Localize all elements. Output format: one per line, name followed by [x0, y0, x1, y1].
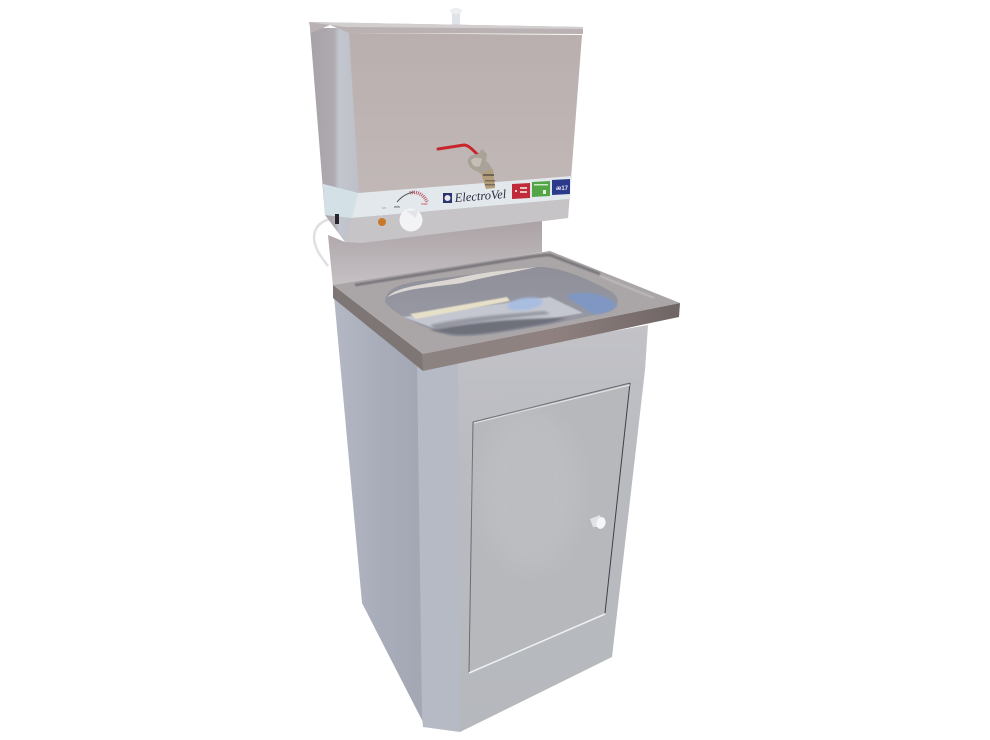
thermostat knob: [400, 208, 422, 232]
temperature scale: [382, 192, 428, 210]
door: [469, 383, 630, 673]
power cable: [314, 218, 335, 266]
basin: [385, 267, 618, 336]
backsplash: [328, 221, 542, 287]
plug socket: [335, 214, 339, 224]
temperature scale: on: [382, 206, 386, 210]
cabinet corner bevel: [417, 356, 460, 732]
blue reflection on floor: [506, 296, 544, 312]
brand logo: ElectroVel: [453, 187, 507, 205]
cabinet: [334, 296, 648, 732]
tank front: [349, 33, 582, 243]
countertop front edge: [422, 303, 680, 371]
tank side: [310, 28, 363, 243]
faucet: [438, 145, 495, 189]
tank lid: [309, 22, 583, 34]
countertop left edge: [333, 285, 423, 371]
basin rim: [385, 267, 618, 336]
hose nozzle: [481, 169, 495, 189]
faucet body: [468, 149, 493, 175]
sink unit: [333, 251, 680, 371]
dark floor band: [430, 318, 568, 335]
upper wall highlight: [388, 267, 537, 297]
temperature scale: max: [421, 202, 428, 206]
water filler cap: [450, 8, 462, 25]
feature badges: [512, 179, 570, 199]
tan highlight: [410, 297, 510, 319]
door knob: [590, 515, 607, 530]
basin floor: [403, 297, 583, 335]
blue reflection right wall: [566, 293, 617, 314]
indicator lamp: [378, 218, 386, 226]
control band: [323, 176, 572, 218]
red lever handle: [438, 145, 478, 155]
temperature scale: min: [394, 205, 400, 209]
tank lower front: [345, 199, 569, 243]
green badge: [532, 181, 550, 197]
water tank: [309, 22, 583, 243]
blue badge: ӕ17: [556, 186, 569, 192]
countertop surface: [333, 251, 680, 354]
cabinet side: [334, 296, 424, 724]
cabinet front: [458, 325, 648, 732]
rim groove: [355, 255, 600, 285]
red badge: [512, 183, 530, 199]
